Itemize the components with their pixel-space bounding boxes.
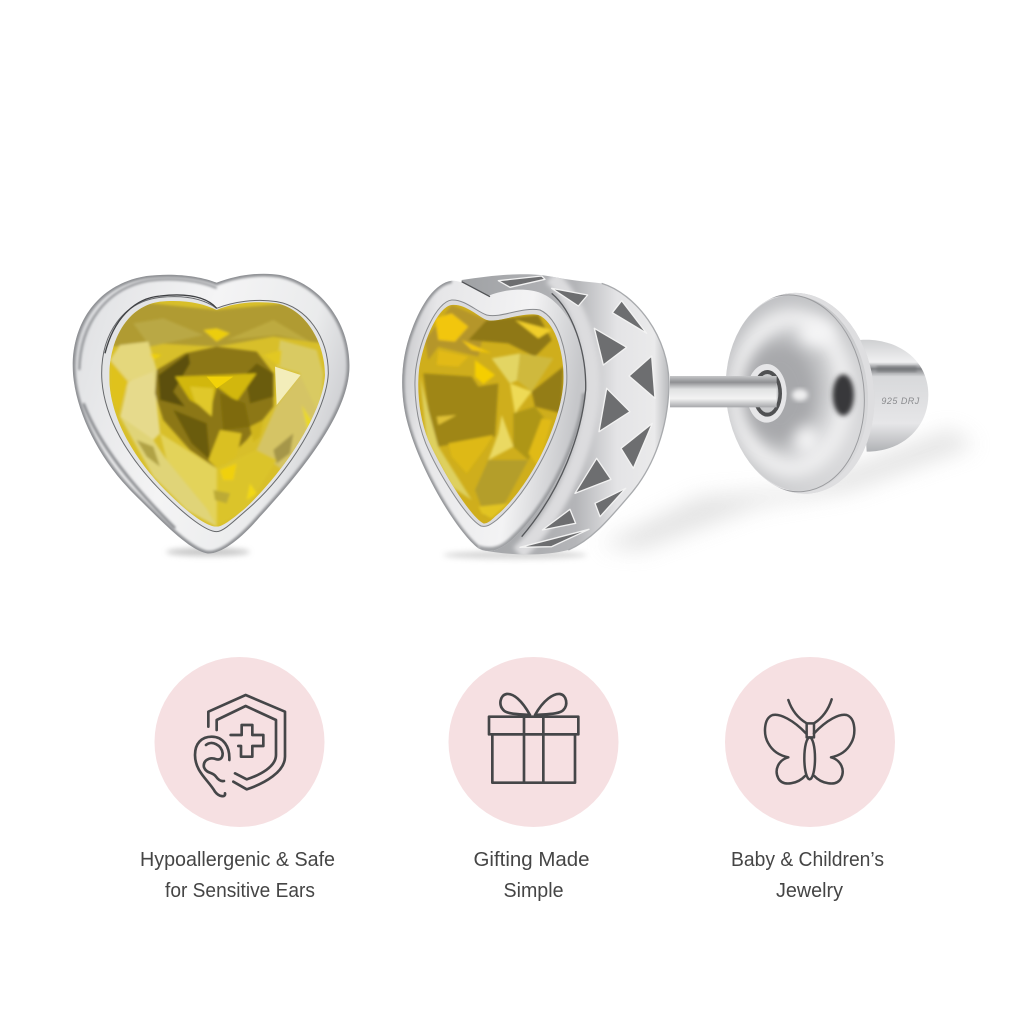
pink circle xyxy=(154,657,324,827)
back cylinder xyxy=(860,340,928,452)
feature: baby and children's jewelry xyxy=(725,657,895,902)
feature: gifting xyxy=(448,657,618,902)
basket cutouts xyxy=(498,276,655,547)
left earring: front view heart xyxy=(73,274,349,553)
icon: butterfly xyxy=(765,699,854,784)
right earring: side view heart xyxy=(402,274,669,554)
icon: gift box xyxy=(489,694,578,783)
label: Baby & Children’s xyxy=(731,849,884,871)
bright facet xyxy=(275,367,301,405)
bezel xyxy=(402,281,586,551)
yellow gem xyxy=(109,301,325,527)
pink circle xyxy=(448,657,618,827)
back disc xyxy=(726,292,872,494)
label: Jewelry xyxy=(776,880,843,902)
label: for Sensitive Ears xyxy=(165,880,315,902)
screw back and post xyxy=(670,283,928,504)
label: Gifting Made xyxy=(474,849,590,871)
post xyxy=(670,376,777,407)
bezel xyxy=(73,274,349,553)
label: Hypoallergenic & Safe xyxy=(140,849,335,871)
yellow gem xyxy=(418,304,564,524)
stamp text: 925 DRJ xyxy=(881,396,920,406)
icon: ear and shield xyxy=(195,695,285,796)
label: Simple xyxy=(504,880,564,902)
feature: hypoallergenic xyxy=(140,657,341,902)
pink circle xyxy=(725,657,895,827)
cast shadows under earrings xyxy=(166,430,975,559)
openwork basket body xyxy=(462,274,669,554)
